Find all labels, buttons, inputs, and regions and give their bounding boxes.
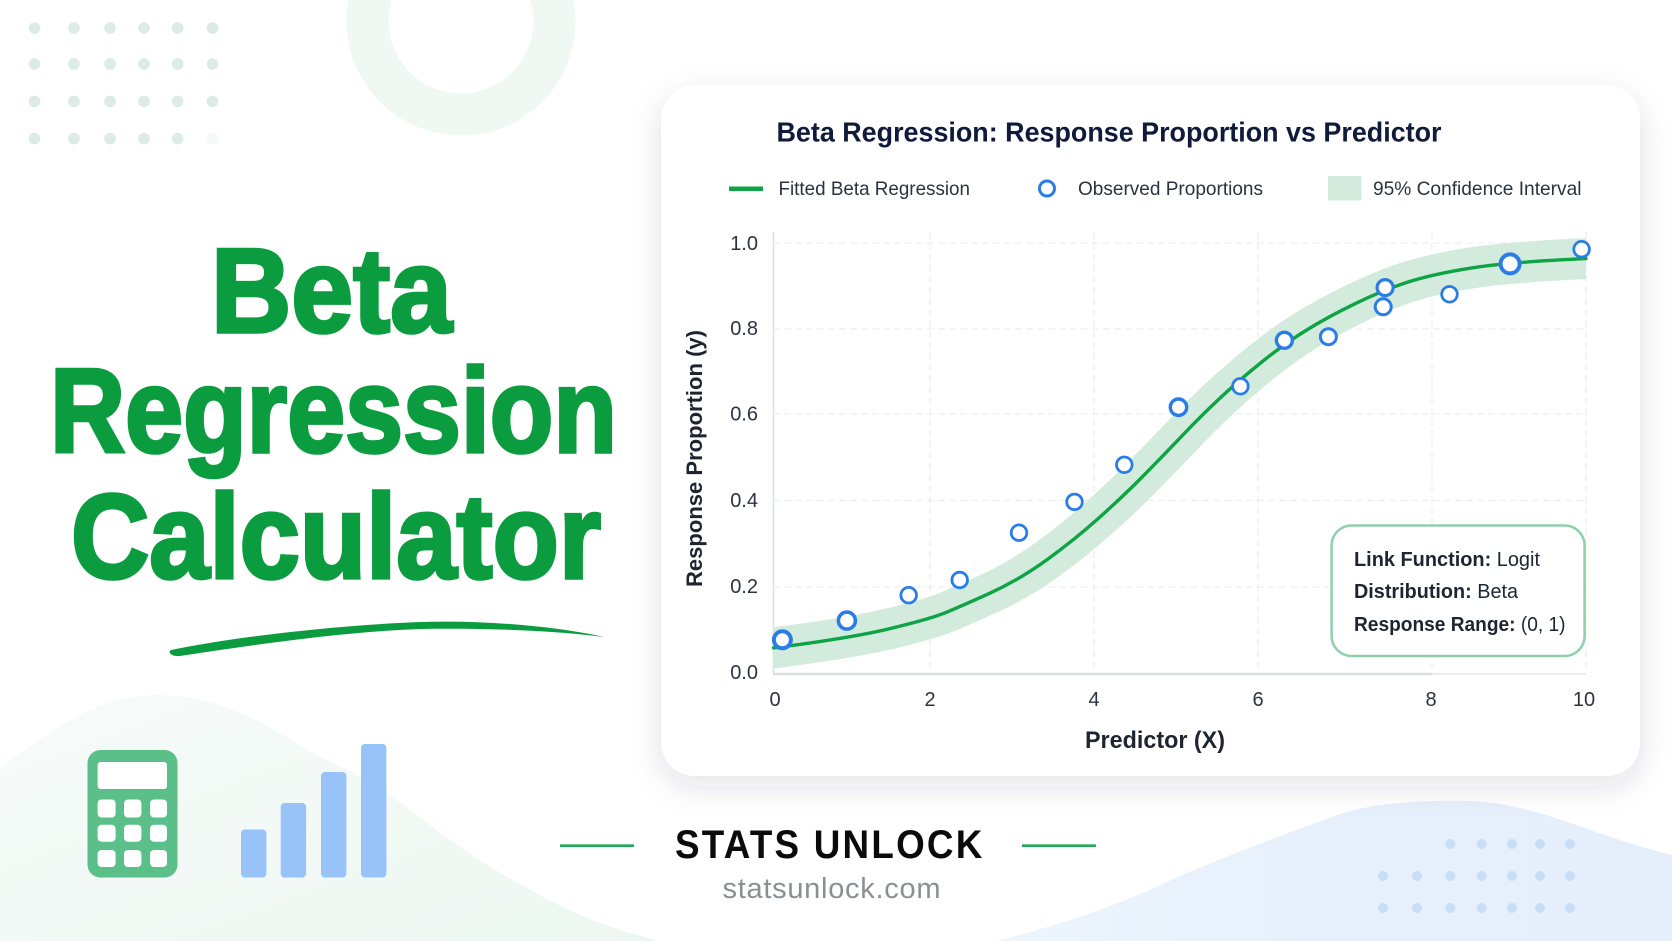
background wave: blue bottom right — [996, 801, 1672, 941]
x axis labels: 4 — [1088, 689, 1100, 711]
brand: Stats Unlock: STATS UNLOCK — [675, 823, 983, 867]
x axis labels: 2 — [924, 689, 936, 711]
legend: 95% Confidence Interval — [1373, 178, 1582, 200]
confidence band — [720, 258, 1630, 652]
icon: bar chart — [241, 744, 386, 878]
decorative ring — [368, 0, 554, 114]
observed points — [774, 241, 1589, 648]
y axis labels — [730, 233, 758, 684]
legend: Observed Proportions — [1078, 178, 1263, 200]
y axis labels: 0.2 — [730, 576, 758, 598]
callout: model details: Distribution: Beta — [1354, 581, 1519, 603]
x axis labels: 6 — [1252, 689, 1264, 711]
fitted curve — [774, 259, 1586, 648]
main title: Regression — [50, 344, 617, 478]
x axis labels: 10 — [1573, 689, 1595, 711]
x axis labels: 8 — [1425, 689, 1437, 711]
chart grid and axes — [773, 232, 1586, 674]
chart title: Beta Regression: Response Proportion vs Predictor — [776, 116, 1442, 148]
x axis labels: 0 — [769, 689, 781, 711]
y axis title: Response Proportion (y) — [682, 330, 707, 587]
y axis labels: 1.0 — [730, 233, 758, 255]
callout: model details: Link Function: Logit — [1354, 549, 1540, 571]
decorative green dots — [29, 22, 218, 144]
panel: chart card — [661, 85, 1640, 776]
x axis labels — [769, 689, 1595, 711]
legend — [729, 176, 1582, 200]
y axis labels: 0.8 — [730, 318, 758, 340]
x axis title: Predictor (X) — [1085, 727, 1225, 754]
brand: Stats Unlock — [560, 823, 1096, 905]
main title — [50, 224, 617, 604]
main title: Calculator — [71, 470, 601, 604]
brand: Stats Unlock: statsunlock.com — [722, 873, 940, 905]
main title: Beta — [211, 224, 453, 358]
background wave: green bottom left — [0, 695, 660, 941]
callout: model details — [1332, 526, 1585, 656]
decorative blue dots — [1378, 839, 1575, 913]
y axis labels: 0.4 — [730, 490, 758, 512]
y axis labels: 0.6 — [730, 404, 758, 426]
legend: Fitted Beta Regression — [778, 178, 970, 200]
title underline swoosh — [170, 622, 604, 656]
icon: calculator — [88, 750, 178, 878]
y axis labels: 0.0 — [730, 662, 758, 684]
callout: model details: Response Range: (0, 1) — [1354, 614, 1566, 636]
